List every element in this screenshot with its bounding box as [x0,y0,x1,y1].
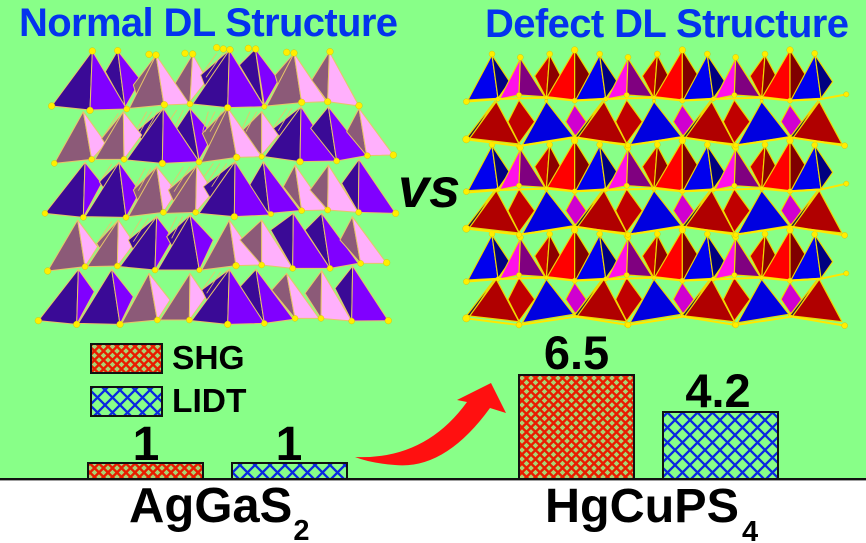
compound label: AgGaS2: AgGaS [129,479,292,533]
row 5 of tetrahedra [38,266,388,324]
value: 4.2: 4.2 [685,364,751,417]
row 3 of tetrahedra [45,159,396,217]
legend [91,340,247,420]
bar: LIDT 1 [232,463,347,479]
normal DL crystal structure [35,44,399,328]
row 4 of tetrahedra [48,213,387,271]
bar: SHG 1 [88,463,203,479]
compound label: HgCuPS4: HgCuPS [545,479,739,533]
defect DL crystal structure [463,47,849,329]
title: defect DL structure: Defect DL Structure [485,2,849,46]
value: 6.5: 6.5 [544,326,609,379]
tetrahedra layers, lower orientation [467,99,842,327]
yellow bonding chains [463,92,849,329]
vs label: vs [398,156,460,219]
legend swatch: SHG [91,344,162,373]
bar chart: AgGaS2 [88,418,347,479]
bar: LIDT 4.2 [663,412,778,479]
legend label: LIDT: LIDT [172,383,247,420]
bar: SHG 6.5 [519,375,634,479]
row 1 of tetrahedra [52,49,359,110]
value: LIDT 1: 1 [276,418,302,471]
arrow: red curved arrow [355,383,506,465]
ground line [0,478,866,480]
value: SHG 1: 1 [133,418,159,471]
legend label: SHG: SHG [172,340,245,377]
tetrahedra layers, upper orientation [468,47,833,283]
yellow atoms [35,44,399,328]
title: normal DL structure: Normal DL Structure [19,1,398,45]
bar chart: HgCuPS4 [519,326,778,479]
legend swatch: LIDT [91,387,162,416]
row 2 of tetrahedra [54,107,393,163]
